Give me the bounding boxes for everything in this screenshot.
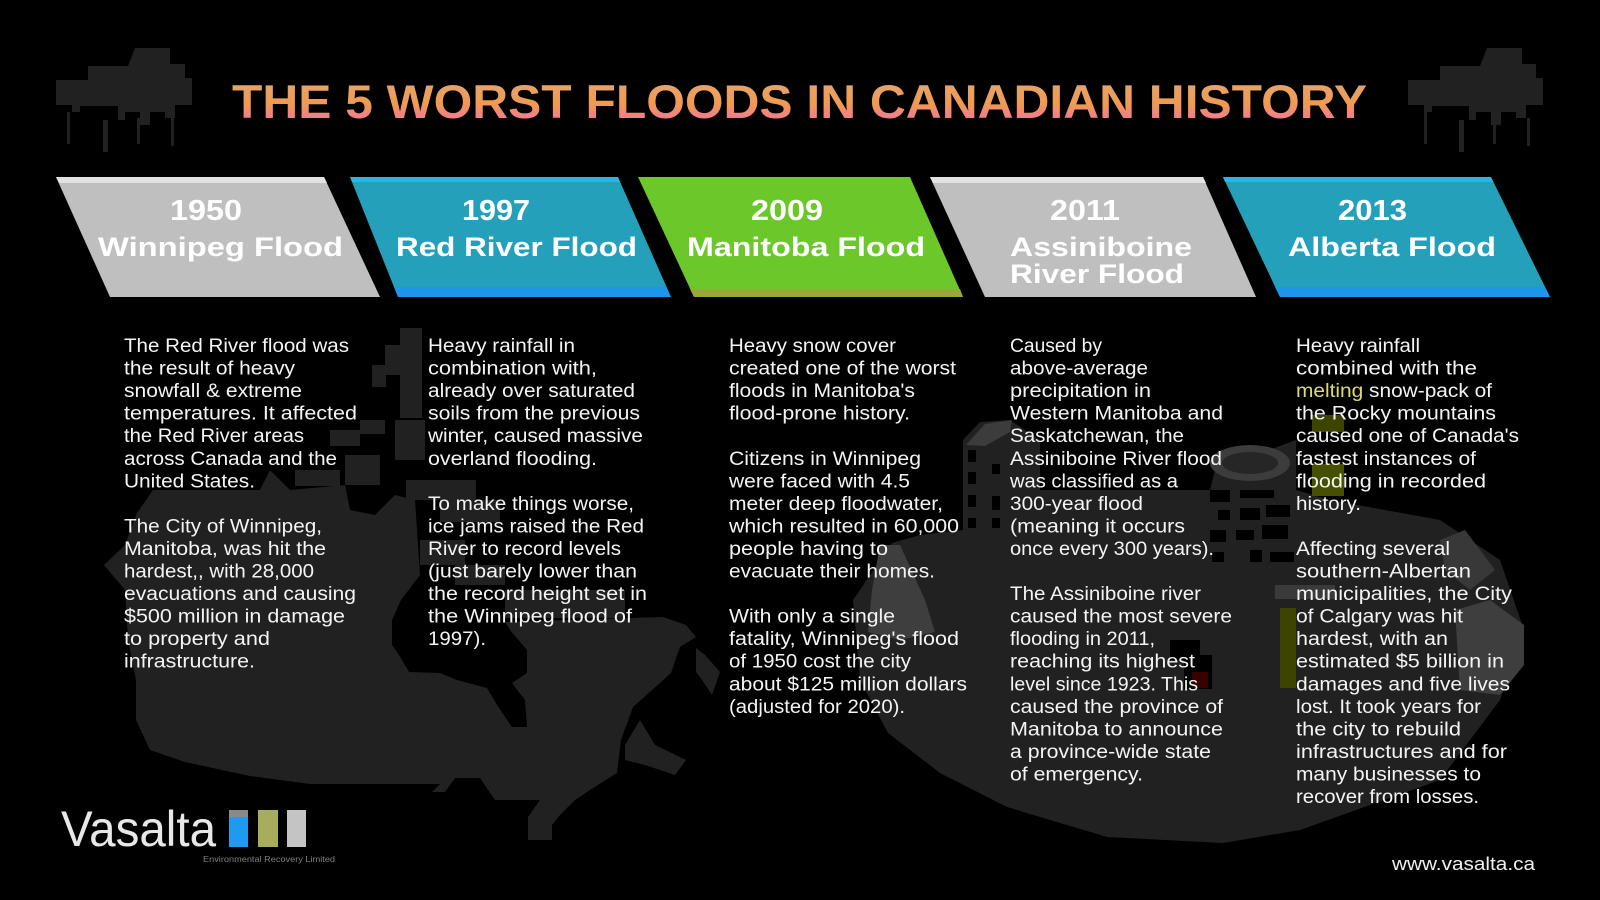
banner: 1950 Winnipeg Flood: Winnipeg Flood: [98, 232, 343, 262]
text block: 2009 Manitoba flood: flood-prone history.: [729, 404, 910, 425]
text block: 2011 Assiniboine River flood: (meaning it occurs: [1010, 516, 1185, 537]
text block: 2011 Assiniboine River flood: Western Manitoba and: [1010, 404, 1223, 425]
icon: rain cloud left: [56, 48, 192, 152]
text block: 1997 Red River flood: [427, 336, 647, 650]
text block: 2011 Assiniboine River flood: Caused by: [1010, 336, 1102, 357]
text block: 1997 Red River flood: winter, caused massive: [427, 426, 643, 447]
text block: 2013 Alberta flood: [1296, 336, 1519, 808]
text block: 1950 Winnipeg flood: evacuations and causing: [124, 584, 356, 605]
text block: 2013 Alberta flood: combined with the: [1296, 358, 1477, 380]
banner: 1950 Winnipeg Flood: [56, 177, 380, 297]
text block: 1997 Red River flood: the Winnipeg flood of: [428, 607, 633, 628]
text block: 2009 Manitoba flood: With only a single: [729, 607, 895, 628]
text block: 2011 Assiniboine River flood: Manitoba to announce: [1010, 719, 1223, 740]
text block: 2011 Assiniboine River flood: The Assiniboine river: [1010, 584, 1202, 605]
text block: 1997 Red River flood: ice jams raised the Red: [428, 516, 644, 537]
text block: 1950 Winnipeg flood: Manitoba, was hit the: [124, 539, 326, 560]
banner: 2009 Manitoba Flood: [638, 177, 963, 297]
banner: 2009 Manitoba Flood: 2009: [751, 195, 823, 227]
text block: 2013 Alberta flood: history.: [1296, 494, 1361, 515]
text block: 2013 Alberta flood: municipalities, the City: [1296, 584, 1513, 605]
text block: 1950 Winnipeg flood: the Red River areas: [124, 426, 304, 447]
text block: 2013 Alberta flood: the Rocky mountains: [1296, 404, 1496, 425]
text block: 2013 Alberta flood: many businesses to: [1296, 764, 1481, 786]
website url: www.vasalta.ca: [1391, 853, 1536, 874]
text block: 2013 Alberta flood: flooding in recorded: [1296, 471, 1486, 492]
banner: 2011 Assiniboine River Flood: Assiniboine: [1010, 232, 1192, 262]
text block: 2013 Alberta flood: caused one of Canada's: [1296, 426, 1519, 447]
text block: 2009 Manitoba flood: about $125 million dollars: [729, 674, 967, 695]
text block: 2011 Assiniboine River flood: of emergency.: [1010, 764, 1143, 786]
text block: 1997 Red River flood: (just barely lower than: [428, 562, 637, 582]
text block: 1950 Winnipeg flood: [124, 336, 357, 673]
text block: 2009 Manitoba flood: people having to: [729, 539, 888, 560]
banner: 2011 Assiniboine River Flood: River Flood: [1010, 259, 1184, 289]
banner: 2013 Alberta Flood: 2013: [1338, 195, 1407, 227]
text block: 1997 Red River flood: Heavy rainfall in: [428, 336, 575, 357]
background: sandbag and building flood illustration: [853, 415, 1524, 843]
text block: 1950 Winnipeg flood: United States.: [124, 471, 255, 492]
text block: 2013 Alberta flood: Affecting several: [1296, 539, 1450, 560]
text block: 1950 Winnipeg flood: to property and: [124, 629, 270, 650]
banner: 2013 Alberta Flood: Alberta Flood: [1288, 232, 1496, 262]
text block: 1950 Winnipeg flood: The Red River flood was: [124, 336, 349, 357]
text block: 2009 Manitoba flood: which resulted in 60,000: [728, 516, 959, 537]
logo: Vasalta: Vasalta: [61, 801, 216, 857]
text block: 2011 Assiniboine River flood: caused the province of: [1010, 697, 1224, 718]
text block: 2009 Manitoba flood: Heavy snow cover: [729, 336, 897, 357]
text block: 2009 Manitoba flood: floods in Manitoba's: [729, 381, 915, 402]
text block: 1997 Red River flood: River to record levels: [428, 539, 621, 560]
text block: 2013 Alberta flood: infrastructures and for: [1296, 742, 1508, 763]
text block: 2011 Assiniboine River flood: precipitation in: [1010, 381, 1151, 402]
text block: 2011 Assiniboine River flood: level since 1923. This: [1010, 674, 1198, 695]
text block: 1950 Winnipeg flood: the result of heavy: [124, 358, 296, 380]
text block: 2009 Manitoba flood: fatality, Winnipeg's flood: [729, 629, 959, 650]
text block: 2009 Manitoba flood: created one of the worst: [729, 358, 957, 380]
text block: 1950 Winnipeg flood: snowfall & extreme: [124, 381, 302, 402]
text block: 2011 Assiniboine River flood: [1009, 336, 1232, 786]
text block: 2009 Manitoba flood: were faced with 4.5: [728, 471, 910, 492]
text block: 2011 Assiniboine River flood: a province-wide state: [1010, 742, 1211, 763]
text block: 1950 Winnipeg flood: temperatures. It affected: [124, 404, 357, 425]
text block: 2009 Manitoba flood: Citizens in Winnipeg: [729, 449, 921, 470]
text block: 2013 Alberta flood: the city to rebuild: [1296, 719, 1461, 740]
text block: 2009 Manitoba flood: evacuate their homes.: [729, 562, 935, 582]
text block: 1997 Red River flood: overland flooding.: [428, 449, 597, 470]
icon: rain cloud right: [1408, 48, 1543, 152]
text block: 2011 Assiniboine River flood: 300-year flood: [1010, 494, 1143, 515]
banner: 2013 Alberta Flood: [1223, 177, 1550, 297]
text block: 2009 Manitoba flood: of 1950 cost the city: [729, 652, 912, 673]
text block: 2013 Alberta flood: recover from losses.: [1296, 787, 1479, 808]
text block: 1997 Red River flood: To make things worse,: [428, 494, 634, 515]
text block: 2013 Alberta flood: melting snow-pack of: [1296, 381, 1493, 402]
banner: 1997 Red River Flood: [350, 177, 671, 297]
text block: 2009 Manitoba flood: (adjusted for 2020).: [729, 697, 905, 718]
banner: 2011 Assiniboine River Flood: [930, 177, 1256, 297]
banner: 2009 Manitoba Flood: Manitoba Flood: [687, 232, 925, 262]
text block: 1997 Red River flood: 1997).: [428, 629, 486, 650]
text block: 2011 Assiniboine River flood: above-average: [1010, 358, 1148, 380]
text block: 1950 Winnipeg flood: $500 million in damage: [124, 607, 345, 628]
text block: 2013 Alberta flood: lost. It took years for: [1296, 697, 1482, 718]
background: map of Canada silhouette: [104, 328, 720, 840]
logo: Vasalta: [61, 801, 335, 864]
text block: 2013 Alberta flood: fastest instances of: [1296, 449, 1477, 470]
text block: 2011 Assiniboine River flood: Saskatchewan, the: [1010, 426, 1184, 447]
title: THE 5 WORST FLOODS IN CANADIAN HISTORY: [232, 75, 1367, 128]
text block: 1950 Winnipeg flood: across Canada and the: [124, 449, 337, 470]
banner: 1950 Winnipeg Flood: 1950: [170, 195, 242, 227]
text block: 2011 Assiniboine River flood: Assiniboine River flood: [1010, 449, 1222, 470]
text block: 1997 Red River flood: soils from the previous: [428, 404, 640, 425]
text block: 1950 Winnipeg flood: infrastructure.: [124, 652, 255, 673]
text block: 2011 Assiniboine River flood: flooding in 2011,: [1010, 629, 1155, 650]
text block: 1950 Winnipeg flood: The City of Winnipeg,: [124, 516, 322, 537]
banner: 1997 Red River Flood: 1997: [462, 195, 530, 227]
text block: 2011 Assiniboine River flood: reaching its highest: [1010, 652, 1196, 673]
text block: 2013 Alberta flood: damages and five lives: [1296, 674, 1510, 695]
banner: 2011 Assiniboine River Flood: 2011: [1050, 195, 1120, 227]
text block: 2013 Alberta flood: hardest, with an: [1296, 629, 1448, 650]
text block: 2009 Manitoba flood: [728, 336, 967, 718]
text block: 1997 Red River flood: already over saturated: [428, 381, 635, 402]
text block: 2013 Alberta flood: estimated $5 billion in: [1296, 652, 1504, 673]
text block: 2013 Alberta flood: Heavy rainfall: [1296, 336, 1420, 357]
banner: 1997 Red River Flood: Red River Flood: [396, 232, 637, 262]
text block: 1997 Red River flood: combination with,: [428, 358, 597, 380]
text block: 2009 Manitoba flood: meter deep floodwater,: [729, 494, 943, 515]
text block: 2013 Alberta flood: of Calgary was hit: [1296, 607, 1464, 628]
text block: 1950 Winnipeg flood: hardest,, with 28,000: [124, 562, 314, 582]
text block: 2011 Assiniboine River flood: once every 300 years).: [1010, 539, 1214, 560]
text block: 2013 Alberta flood: southern-Albertan: [1296, 562, 1471, 582]
logo: Vasalta: Environmental Recovery Limited: [203, 855, 335, 864]
text block: 1997 Red River flood: the record height set in: [428, 584, 647, 605]
text block: 2011 Assiniboine River flood: was classified as a: [1009, 471, 1178, 492]
text block: 2011 Assiniboine River flood: caused the most severe: [1010, 607, 1232, 628]
